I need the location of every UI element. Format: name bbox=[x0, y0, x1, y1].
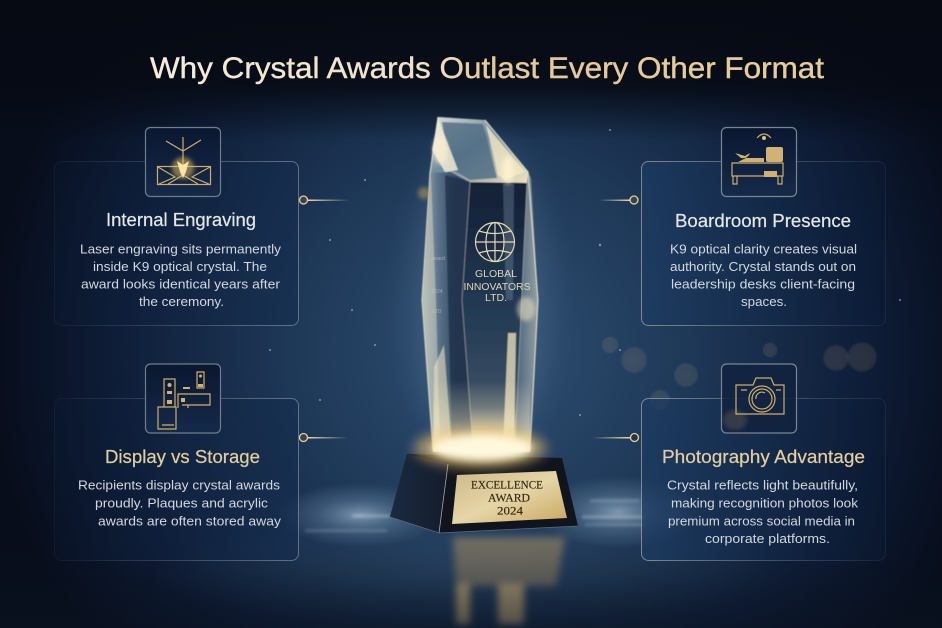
icon: display cabinet bbox=[146, 364, 220, 433]
body text bbox=[78, 478, 282, 528]
panel: internal engraving bbox=[54, 128, 298, 326]
crystal body: 2024 bbox=[431, 289, 443, 295]
icon: boardroom desk bbox=[722, 128, 796, 196]
base bbox=[390, 454, 578, 533]
body text: Recipients display crystal awards bbox=[78, 478, 281, 492]
connector: bottom right bbox=[592, 434, 638, 442]
body text: the ceremony. bbox=[139, 294, 224, 309]
heading: Display vs Storage bbox=[105, 447, 260, 467]
panel: photography advantage bbox=[642, 364, 886, 560]
connector: bottom left bbox=[300, 434, 348, 442]
engraved company name: LTD. bbox=[485, 293, 507, 304]
award plaque: AWARD bbox=[488, 492, 530, 504]
body text: award looks identical years after bbox=[81, 276, 281, 292]
connector: top right bbox=[599, 196, 638, 204]
body text: making recognition photos look bbox=[671, 496, 859, 510]
body text bbox=[667, 478, 859, 546]
body text: Crystal reflects light beautifully, bbox=[667, 478, 858, 492]
body text bbox=[80, 242, 282, 309]
engraved company name: INNOVATORS bbox=[464, 282, 531, 293]
body text bbox=[670, 242, 857, 309]
body text: spaces. bbox=[741, 294, 787, 309]
icon: camera bbox=[722, 364, 796, 433]
crystal trophy bbox=[390, 117, 578, 533]
body text: K9 optical clarity creates visual bbox=[670, 242, 857, 256]
body text: corporate platforms. bbox=[705, 531, 830, 546]
panel: display vs storage bbox=[54, 364, 298, 560]
engraved company name: GLOBAL bbox=[475, 269, 517, 280]
heading: Internal Engraving bbox=[106, 210, 256, 230]
crystal body: award bbox=[431, 256, 445, 262]
icon: engraving bbox=[146, 128, 220, 196]
crystal body: LTD bbox=[432, 309, 442, 315]
award plaque: 2024 bbox=[497, 506, 523, 518]
crystal body bbox=[408, 117, 552, 465]
body text: premium across social media in bbox=[668, 514, 855, 528]
body text: Laser engraving sits permanently bbox=[80, 242, 282, 256]
base glow bbox=[414, 428, 546, 468]
heading: Photography Advantage bbox=[662, 447, 865, 467]
heading: Boardroom Presence bbox=[675, 211, 851, 231]
award plaque: EXCELLENCE bbox=[471, 480, 543, 492]
body text: awards are often stored away bbox=[98, 514, 282, 528]
body text: inside K9 optical crystal. The bbox=[93, 259, 267, 274]
title: Why Crystal Awards Outlast Every Other Format bbox=[150, 52, 825, 85]
engraved company name bbox=[464, 269, 531, 304]
body text: proudly. Plaques and acrylic bbox=[95, 496, 269, 510]
body text: authority. Crystal stands out on bbox=[670, 259, 856, 274]
body text: leadership desks client-facing bbox=[671, 276, 855, 292]
engraved globe logo bbox=[476, 222, 514, 262]
award plaque bbox=[452, 471, 567, 524]
connector: top left bbox=[300, 196, 350, 204]
panel: boardroom presence bbox=[642, 128, 886, 326]
